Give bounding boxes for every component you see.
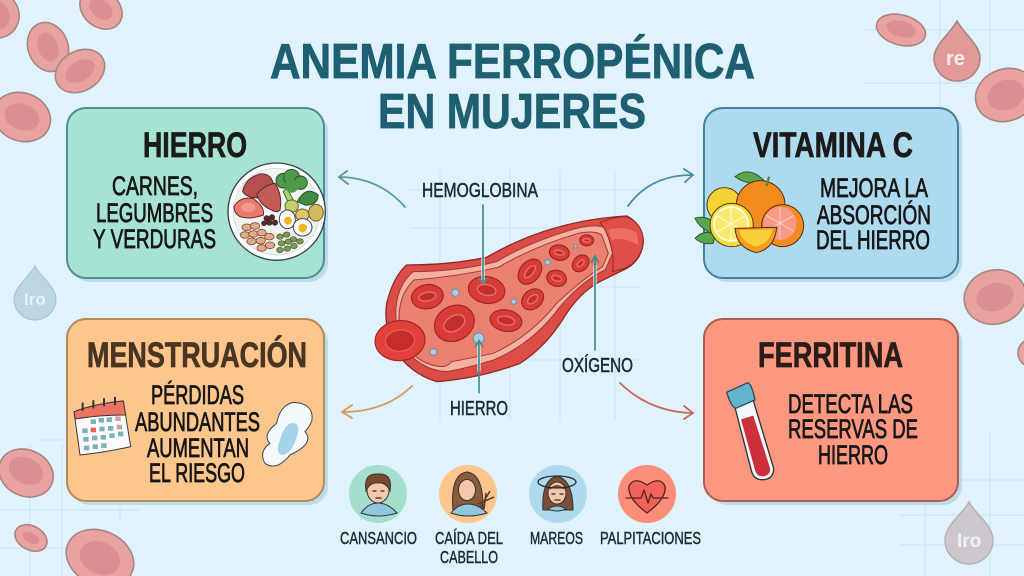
title: EN MUJERES [378,85,646,139]
text: ferritina: HIERRO [818,440,888,470]
illustration: blood vessel [373,205,643,393]
text: hierro foods: CARNES, [112,171,198,201]
icon: blood test tube [727,383,774,480]
symptom: cansancio [340,465,417,548]
arrow: to menstruación [342,386,412,418]
title [270,35,755,139]
heading: ferritina: FERRITINA [758,336,903,375]
decorative blood cells top left [0,0,130,149]
panel: vitamina c [695,108,962,282]
symptom: caída del cabello [435,465,503,567]
icon: calendar [74,398,131,455]
text: hierro foods: LEGUMBRES [96,198,213,228]
iron particles [430,245,577,355]
text: menstruación: AUMENTAN [147,433,249,463]
title: ANEMIA FERROPÉNICA [270,35,755,89]
text: vitamina c: MEJORA LA [820,173,928,203]
decorative blood cells and drop right [945,263,1024,564]
icon: citrus fruits [695,172,804,253]
symptom: palpitaciones [600,465,701,548]
arrow: to hierro [339,171,405,207]
text: vitamina c: ABSORCIÓN [817,199,931,230]
decorative iron drop left: Iro [24,290,46,309]
text: ferritina: RESERVAS DE [788,414,918,444]
text: vitamina c [816,173,931,255]
label: caída del cabello: CAÍDA DEL [435,528,503,548]
text: ferritina [788,389,918,470]
panel: ferritina [704,319,962,505]
label: hierro: HIERRO [450,398,508,420]
text: ferritina: DETECTA LAS [788,389,913,419]
heading: vitamina c: VITAMINA C [753,126,913,165]
symptom: mareos [529,465,587,548]
text: menstruación: PÉRDIDAS [151,380,244,410]
label: oxígeno: OXÍGENO [562,354,633,377]
label: palpitaciones: PALPITACIONES [600,528,701,548]
panel: hierro [67,108,328,282]
label: hemoglobina: HEMOGLOBINA [422,180,539,202]
label: caída del cabello [435,528,503,567]
decorative blood cells and drop right: Iro [957,531,981,552]
text: hierro foods [93,171,216,254]
callout lines [475,205,599,393]
heading: hierro: HIERRO [143,126,247,165]
decorative blood cells and drop top right: re [946,48,965,70]
label: mareos: MAREOS [530,528,583,548]
decorative iron drop left [14,266,56,320]
icon: plate of food [228,163,325,260]
label: cansancio: CANSANCIO [340,528,417,548]
red blood cells [373,234,594,363]
decorative blood cells bottom left [0,440,143,576]
heading: menstruación: MENSTRUACIÓN [87,335,307,375]
panel: menstruación [67,319,328,505]
arrow: to ferritina [620,383,693,419]
text: menstruación: ABUNDANTES [135,407,260,437]
text: menstruación [135,380,260,488]
text: menstruación: EL RIESGO [149,458,245,488]
label: caída del cabello: CABELLO [440,547,498,567]
arrow: to vitamina c [628,169,693,206]
decorative blood cells and drop top right [873,9,1024,130]
text: vitamina c: DEL HIERRO [816,225,930,255]
icon: sanitary pad [263,402,312,466]
text: hierro foods: Y VERDURAS [93,224,216,254]
